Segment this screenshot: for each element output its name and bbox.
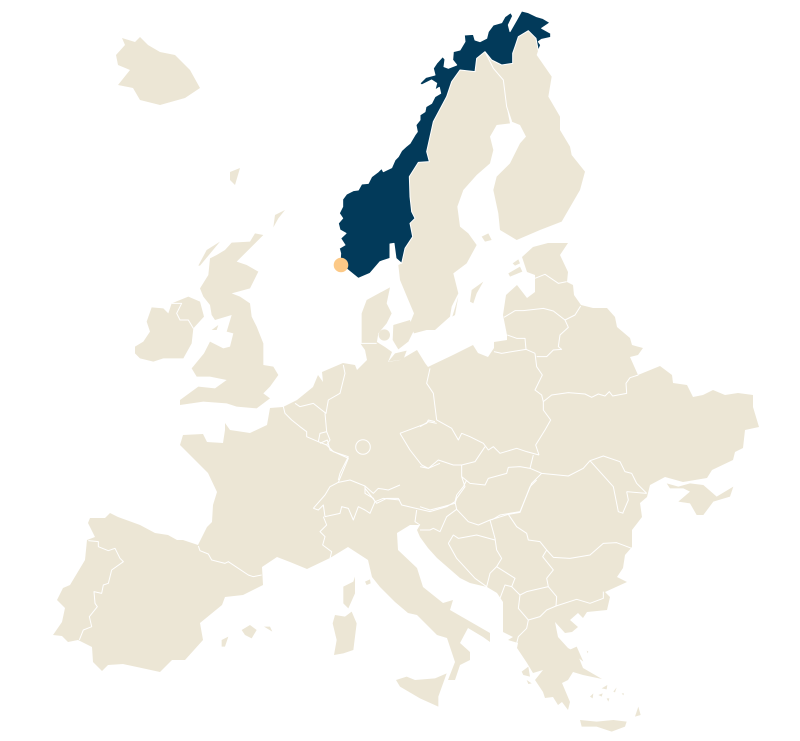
Mediterranean islands [333,577,641,732]
country borders: Benelux and Germany [172,303,440,480]
Baltic islands [452,233,522,317]
Great Britain and Ireland [135,210,285,408]
country borders: Sweden and Finland [485,52,512,122]
landmass: Sweden [398,52,510,333]
highlighted country: Norway [338,11,551,278]
country borders: east [420,274,647,520]
landmass: Finland [485,31,585,240]
landmass: continental Europe [53,243,759,710]
Danish peninsula and islands [362,287,413,362]
Iceland and Faroe Islands [116,37,240,185]
enclave outline: central Germany [356,440,370,454]
Crimea [667,483,733,515]
location marker [334,258,348,272]
country borders: Balkans and Alps [365,480,632,643]
Balearic Islands [222,625,272,647]
country borders: west [79,440,400,640]
